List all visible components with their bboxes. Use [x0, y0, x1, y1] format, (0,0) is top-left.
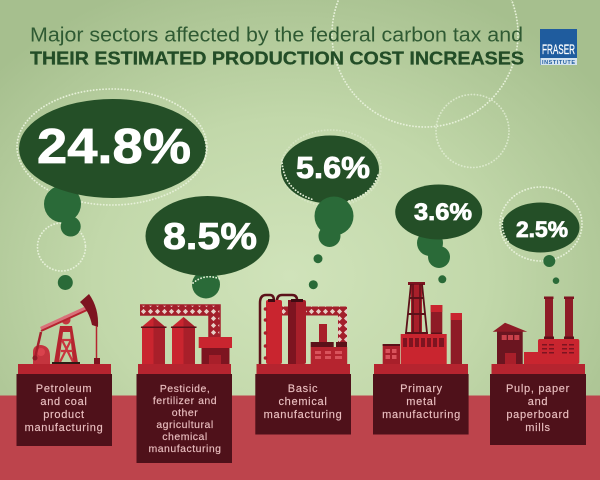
- panel: petroleum: [16, 364, 112, 446]
- panel: pulp and paper: mills: [525, 422, 551, 434]
- panel: pesticide: chemical: [162, 431, 208, 443]
- bubble: 24.8%: [19, 99, 206, 290]
- panel: basic chemical: chemical: [278, 396, 328, 408]
- panel: pulp and paper: [490, 364, 586, 445]
- bubble: 8.5%: [146, 196, 270, 298]
- panel: primary metal: metal: [406, 396, 437, 408]
- decorative dotted circles: [17, 0, 582, 271]
- panel: petroleum: Petroleum: [36, 383, 92, 395]
- logo: Fraser Institute: [540, 29, 577, 66]
- panel: primary metal: Primary: [400, 383, 443, 395]
- logo: Fraser Institute: FRASER: [542, 42, 575, 57]
- panel: basic chemical: manufacturing: [264, 409, 342, 421]
- panel: petroleum: and coal: [40, 396, 88, 408]
- panel: pesticide: agricultural: [156, 419, 214, 431]
- bubble: 3.6%: [395, 184, 482, 283]
- bubble: 2.5%: [502, 202, 580, 284]
- bubble: 5.6%: [281, 136, 379, 289]
- panel: petroleum: manufacturing: [25, 422, 103, 434]
- panel: pulp and paper: paperboard: [506, 409, 570, 421]
- panel: pesticide: other: [172, 407, 198, 419]
- logo: Fraser Institute: INSTITUTE: [542, 60, 575, 66]
- panel: pesticide: manufacturing: [148, 443, 222, 455]
- title: Major sectors affected by the federal carbon tax and: [30, 24, 523, 46]
- panel: pesticide: fertilizer and: [153, 395, 217, 407]
- panel: pesticide: [136, 364, 232, 463]
- panel: pulp and paper: Pulp, paper: [506, 383, 570, 395]
- ground band: [0, 396, 600, 480]
- panel: pulp and paper: and: [528, 396, 548, 408]
- icon: pulp mill: [493, 296, 579, 364]
- icon: silos and gantry: [140, 305, 232, 364]
- panel: primary metal: [373, 364, 469, 434]
- title: THEIR ESTIMATED PRODUCTION COST INCREASES: [30, 48, 524, 68]
- icon: oil pumpjack: [32, 294, 100, 364]
- panel: petroleum: product: [43, 409, 85, 421]
- bubble: 5.6%: 5.6%: [296, 150, 370, 185]
- icon: metal plant: [383, 282, 462, 364]
- bubble: 8.5%: 8.5%: [163, 216, 257, 257]
- bubble: 2.5%: 2.5%: [516, 217, 568, 242]
- title: [30, 24, 524, 68]
- panel: primary metal: manufacturing: [382, 409, 461, 421]
- icon: chemical plant: [260, 295, 347, 364]
- panel: basic chemical: Basic: [288, 383, 318, 395]
- panel: pesticide: Pesticide,: [160, 383, 210, 395]
- bubble: 24.8%: 24.8%: [37, 120, 191, 174]
- panel: basic chemical: [255, 364, 351, 434]
- bubble: 3.6%: 3.6%: [414, 199, 472, 226]
